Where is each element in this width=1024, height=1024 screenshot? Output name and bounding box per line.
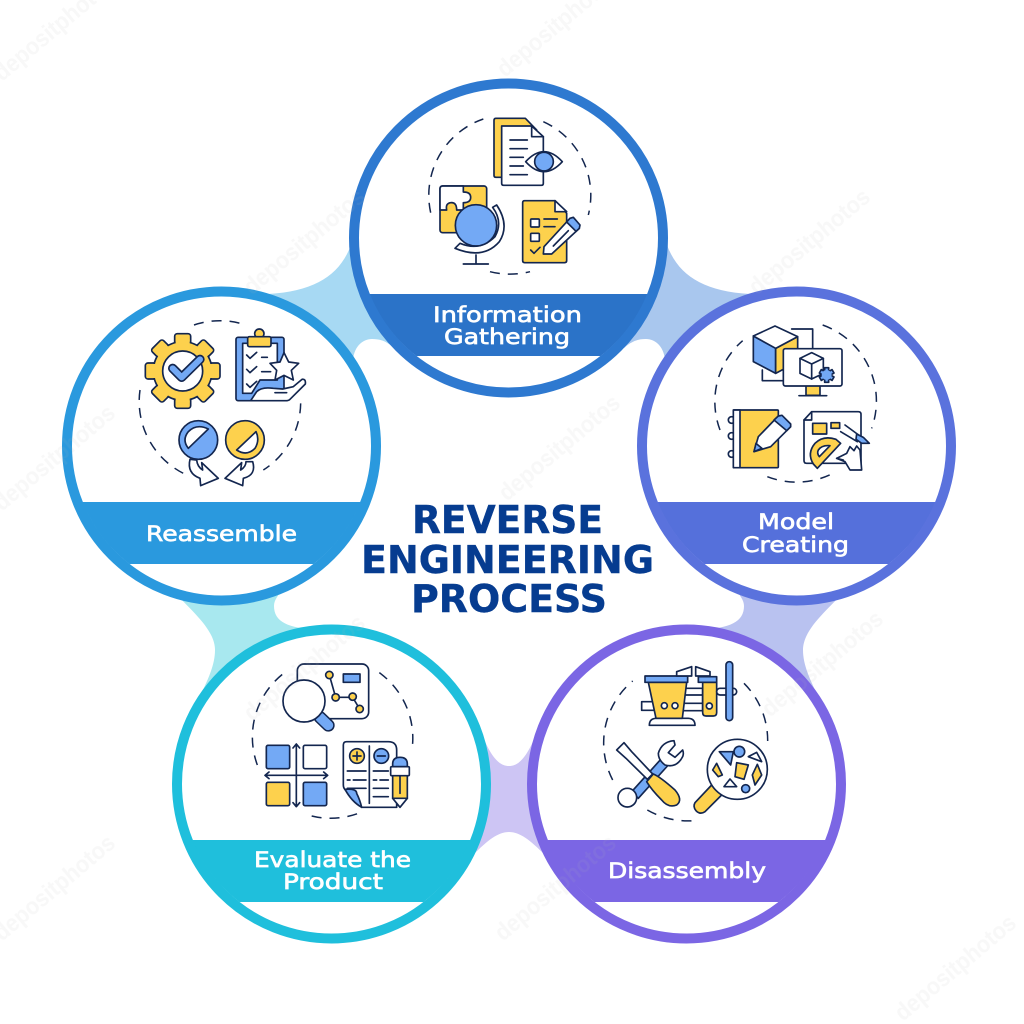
title: REVERSE [412, 498, 603, 542]
connector: reassemble to information gathering [268, 232, 420, 365]
title [361, 498, 654, 621]
label text: Model [758, 510, 834, 535]
title: PROCESS [411, 577, 607, 621]
panel: disassembly [532, 630, 841, 938]
label band [192, 840, 470, 902]
label text: Evaluate the [254, 848, 411, 873]
icon cluster [715, 325, 876, 482]
ring [177, 630, 486, 938]
ring [532, 630, 841, 938]
ring [354, 84, 663, 392]
icon cluster [252, 664, 413, 818]
faint diagonal watermark: depositphotos [239, 183, 371, 301]
connector: information gathering to model creating [598, 232, 750, 365]
connector: reassemble to evaluate the product [172, 560, 318, 700]
label band [82, 502, 360, 564]
label text: Information [433, 303, 582, 328]
icon cluster [429, 118, 591, 274]
panel: reassemble [67, 292, 376, 600]
ring [642, 292, 951, 600]
label band [370, 294, 648, 356]
label band [548, 840, 826, 902]
icon cluster [604, 662, 768, 821]
label band [658, 502, 936, 564]
title: ENGINEERING [361, 538, 654, 582]
panel: evaluate the product [177, 630, 486, 938]
faint diagonal watermark: depositphotos [239, 609, 371, 727]
faint diagonal watermark: depositphotos [744, 183, 876, 301]
connector: evaluate the product to disassembly [460, 730, 560, 855]
faint diagonal watermark: depositphotos [490, 829, 622, 947]
label text: Disassembly [608, 859, 766, 884]
panel: information gathering [354, 84, 663, 392]
faint diagonal watermark: depositphotos [494, 389, 626, 507]
label text: Reassemble [146, 522, 297, 547]
faint diagonal watermark: depositphotos [757, 605, 889, 723]
label text: Gathering [444, 325, 570, 350]
label text: Product [283, 870, 383, 895]
connector: model creating to disassembly [700, 560, 846, 700]
label text: Creating [742, 533, 849, 558]
icon cluster [139, 321, 305, 486]
panel: model creating [642, 292, 951, 600]
ring [67, 292, 376, 600]
